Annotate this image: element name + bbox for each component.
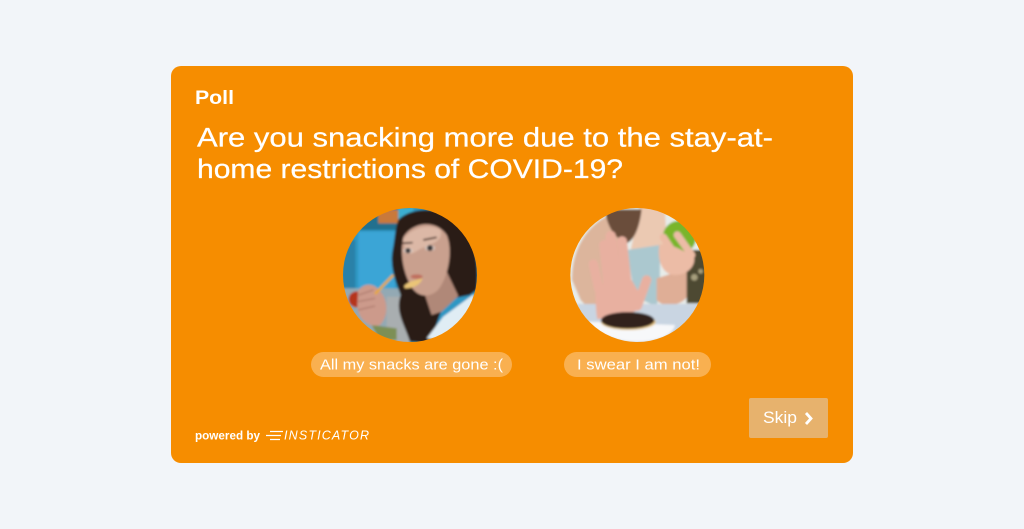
heading: Poll: Poll (195, 88, 234, 109)
option label: I swear I am not: I swear I am not! (577, 356, 700, 374)
skip button: Skip (763, 409, 797, 427)
question text: Are you snacking more due to the stay-at- (197, 122, 773, 152)
icon: Insticator speed lines (266, 432, 283, 440)
option label: All my snacks are gone (311, 352, 512, 377)
question text (197, 122, 773, 184)
skip button (749, 398, 828, 438)
option label: I swear I am not (564, 352, 711, 377)
powered by Insticator logo: INSTICATOR (284, 428, 369, 442)
question text: home restrictions of COVID-19? (197, 154, 623, 184)
icon: chevron right (806, 413, 811, 424)
poll card (171, 66, 853, 463)
powered by Insticator logo (195, 428, 369, 442)
photo: woman snacking (340, 205, 480, 345)
option label: All my snacks are gone: All my snacks are gone :( (320, 356, 503, 374)
photo: hand refusing donut (568, 205, 708, 345)
powered by Insticator logo: powered by (195, 430, 261, 442)
